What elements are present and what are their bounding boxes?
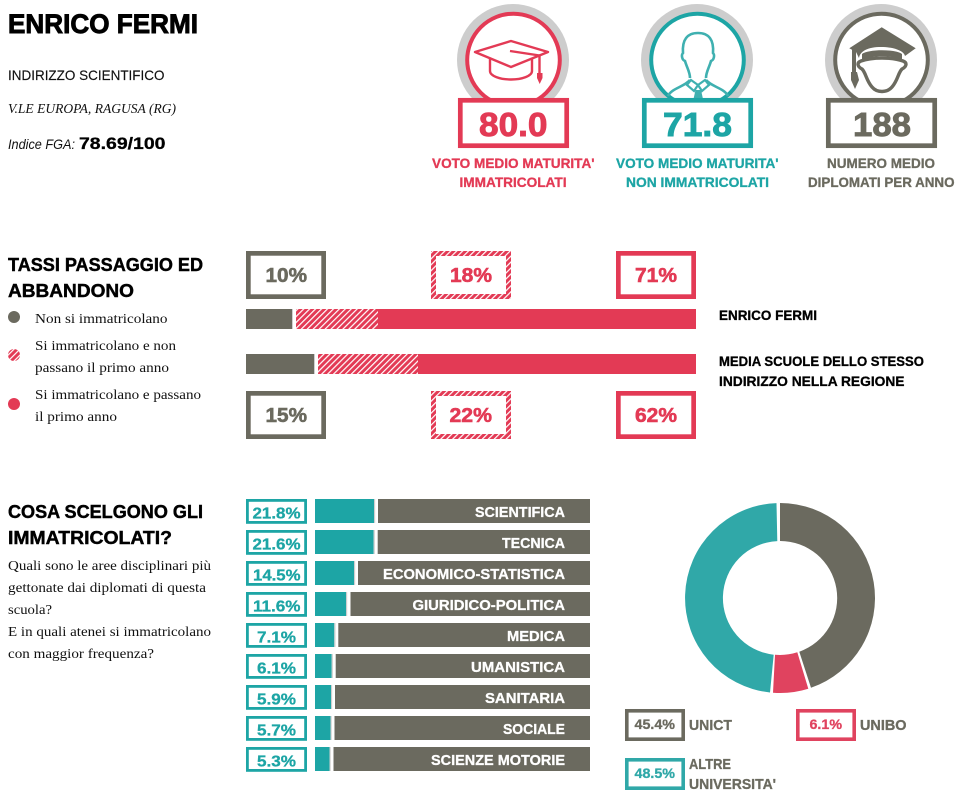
row: medica: 7.1% bbox=[257, 630, 296, 646]
row: scienze motorie bbox=[247, 747, 590, 771]
row: medica: MEDICA bbox=[507, 628, 565, 645]
row: scientifica bbox=[247, 499, 590, 523]
value box 62% bbox=[618, 393, 694, 437]
caption bbox=[616, 156, 778, 190]
donut legend bbox=[627, 711, 906, 793]
value box 22%: 22% bbox=[450, 404, 492, 427]
stacked bar: media regione bbox=[246, 354, 696, 374]
row: scienze motorie: SCIENZE MOTORIE bbox=[431, 752, 565, 769]
row: umanistica: UMANISTICA bbox=[471, 659, 565, 676]
FGA index bbox=[8, 134, 166, 153]
bar label: MEDIA SCUOLE DELLO STESSO bbox=[719, 354, 924, 369]
legend: UNIBO: 6.1% bbox=[810, 716, 843, 732]
row: sociale bbox=[247, 716, 590, 740]
legend: UNICT: 45.4% bbox=[634, 716, 676, 732]
bar label: INDIRIZZO NELLA REGIONE bbox=[719, 374, 904, 389]
legend: altre universita: UNIVERSITA' bbox=[689, 777, 776, 793]
row: economico-statistica: 14.5% bbox=[253, 568, 300, 584]
row: giuridico-politica bbox=[247, 592, 590, 616]
caption bbox=[808, 156, 954, 190]
row: scientifica: SCIENTIFICA bbox=[475, 504, 565, 521]
caption: DIPLOMATI PER ANNO bbox=[808, 175, 954, 190]
description: Quali sono le aree disciplinari più bbox=[8, 558, 211, 573]
row: sociale: SOCIALE bbox=[503, 721, 565, 738]
stat: voto non immatricolati bbox=[616, 4, 778, 190]
FGA index: 78.69/100 bbox=[79, 134, 166, 153]
stacked bar: Enrico Fermi bbox=[246, 309, 696, 329]
panel: tassi passaggio bbox=[8, 251, 924, 439]
caption: IMMATRICOLATI bbox=[460, 175, 566, 190]
bar label bbox=[719, 354, 924, 389]
legend: Si immatricolano e non bbox=[35, 338, 176, 353]
bar chart: aree disciplinari bbox=[247, 499, 590, 771]
description bbox=[8, 558, 211, 661]
stat: voto immatricolati bbox=[432, 4, 594, 190]
value box 18% bbox=[431, 251, 511, 299]
row: economico-statistica: ECONOMICO-STATISTICA bbox=[383, 566, 565, 583]
legend: altre universita: 48.5% bbox=[634, 765, 676, 781]
description: gettonate dai diplomati di questa bbox=[8, 580, 206, 595]
row: giuridico-politica: 11.6% bbox=[253, 598, 300, 616]
legend: altre universita: ALTRE bbox=[689, 757, 731, 773]
caption: VOTO MEDIO MATURITA' bbox=[432, 156, 594, 171]
value box bbox=[644, 100, 751, 146]
title: ENRICO FERMI bbox=[8, 9, 198, 39]
legend bbox=[8, 311, 201, 424]
row: medica bbox=[247, 623, 590, 647]
heading: IMMATRICOLATI? bbox=[8, 527, 172, 548]
school track: INDIRIZZO SCIENTIFICO bbox=[8, 67, 165, 83]
legend: passano il primo anno bbox=[35, 360, 169, 375]
value box 10% bbox=[248, 253, 324, 297]
heading: TASSI PASSAGGIO ED bbox=[8, 254, 203, 275]
value box 62%: 62% bbox=[635, 404, 677, 427]
value box: 71.8 bbox=[663, 107, 732, 144]
caption: VOTO MEDIO MATURITA' bbox=[616, 156, 778, 171]
row: umanistica bbox=[247, 654, 590, 678]
value box bbox=[828, 100, 935, 146]
row: economico-statistica bbox=[247, 561, 590, 585]
value box 22% bbox=[431, 391, 511, 439]
row: sociale: 5.7% bbox=[257, 722, 296, 740]
row: tecnica: TECNICA bbox=[502, 535, 565, 552]
address: V.LE EUROPA, RAGUSA (RG) bbox=[8, 102, 176, 117]
caption bbox=[432, 156, 594, 190]
FGA index: Indice FGA: bbox=[8, 136, 75, 152]
legend: Non si immatricolano bbox=[35, 311, 168, 326]
legend: il primo anno bbox=[35, 409, 117, 424]
value box 71%: 71% bbox=[635, 264, 677, 287]
icon: graduation cap outline bbox=[457, 4, 569, 116]
row: tecnica bbox=[247, 530, 590, 554]
value box: 188 bbox=[853, 107, 911, 144]
row: sanitaria bbox=[247, 685, 590, 709]
row: sanitaria: 5.9% bbox=[257, 692, 296, 708]
caption: NUMERO MEDIO bbox=[827, 156, 935, 171]
description: E in quali atenei si immatricolano bbox=[8, 624, 211, 639]
description: con maggior frequenza? bbox=[8, 646, 154, 661]
value box bbox=[460, 100, 567, 146]
row: giuridico-politica: GIURIDICO-POLITICA bbox=[412, 597, 565, 614]
row: umanistica: 6.1% bbox=[257, 660, 296, 678]
value box 15% bbox=[248, 393, 324, 437]
donut chart: atenei bbox=[685, 503, 875, 693]
heading bbox=[8, 254, 203, 301]
heading: COSA SCELGONO GLI bbox=[8, 501, 203, 522]
heading bbox=[8, 501, 203, 548]
bar label: ENRICO FERMI bbox=[719, 308, 817, 323]
row: scienze motorie: 5.3% bbox=[257, 754, 296, 770]
value box 71% bbox=[618, 253, 694, 297]
legend: UNICT bbox=[627, 711, 732, 739]
header: school info bbox=[8, 9, 198, 153]
row: sanitaria: SANITARIA bbox=[485, 690, 565, 707]
panel: cosa scelgono bbox=[8, 499, 906, 793]
icon: person outline bbox=[641, 4, 753, 116]
value box 18%: 18% bbox=[450, 264, 492, 287]
value box 15%: 15% bbox=[266, 404, 307, 427]
legend: UNIBO bbox=[798, 711, 906, 739]
legend: UNICT: UNICT bbox=[689, 718, 732, 734]
legend: UNIBO: UNIBO bbox=[860, 718, 906, 734]
stat: numero diplomati bbox=[808, 4, 954, 190]
row: scientifica: 21.8% bbox=[252, 506, 300, 522]
legend: altre universita bbox=[627, 757, 776, 793]
value box 10%: 10% bbox=[266, 264, 307, 287]
legend: Si immatricolano e passano bbox=[35, 387, 201, 402]
value box: 80.0 bbox=[479, 107, 548, 144]
description: scuola? bbox=[8, 602, 52, 617]
row: tecnica: 21.6% bbox=[252, 536, 300, 554]
icon: graduate head bbox=[825, 4, 937, 116]
heading: ABBANDONO bbox=[8, 280, 134, 301]
caption: NON IMMATRICOLATI bbox=[626, 175, 769, 190]
